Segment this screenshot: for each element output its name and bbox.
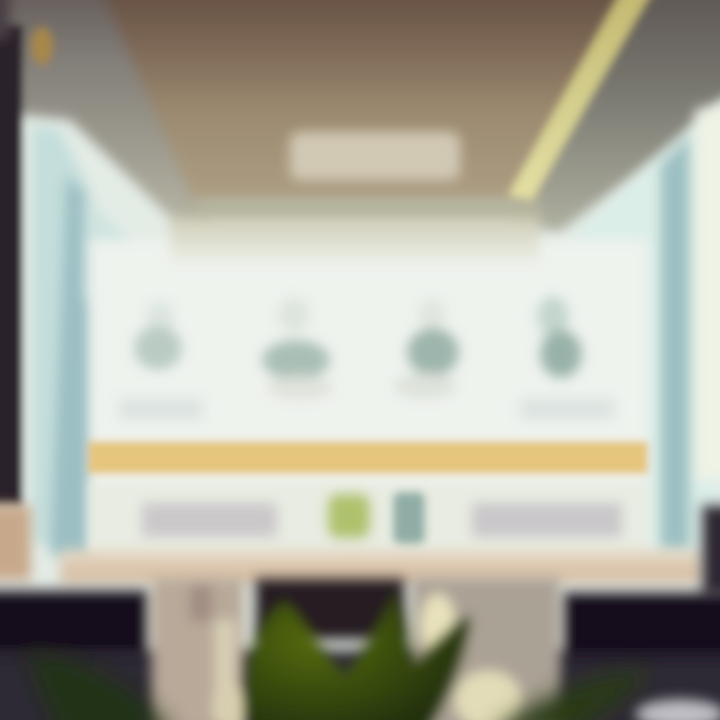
wall panel xyxy=(90,240,648,555)
orange light xyxy=(31,27,53,65)
plant leaves left xyxy=(25,650,175,720)
table edge xyxy=(60,550,700,582)
dark seating left xyxy=(0,590,148,656)
yellow banner xyxy=(88,441,648,474)
blurred captions xyxy=(118,398,615,420)
left ceiling beam xyxy=(0,0,215,232)
left dark column top xyxy=(0,0,10,40)
lower panel xyxy=(88,482,648,554)
dark seating right xyxy=(563,592,720,658)
icon: blurred graphic 1 xyxy=(134,300,182,370)
icon: blurred graphic 3 xyxy=(393,298,459,399)
lower left text block xyxy=(142,503,277,537)
blurred ceiling sign xyxy=(290,132,460,180)
right window xyxy=(575,100,720,560)
icon: blurred graphic 2 xyxy=(262,297,334,400)
cream highlights xyxy=(214,593,720,720)
left dark column xyxy=(0,25,23,505)
dark corner right xyxy=(702,505,720,595)
green square xyxy=(328,494,370,538)
left window xyxy=(32,125,130,560)
ceiling light strip xyxy=(508,0,662,200)
right ceiling beam xyxy=(510,0,720,232)
teal square xyxy=(393,492,425,544)
lower floor xyxy=(0,650,720,720)
left column base xyxy=(0,505,31,580)
wall top fade xyxy=(170,218,540,268)
ceiling xyxy=(95,0,630,205)
plant leaves right xyxy=(490,670,650,720)
ceiling soffit band xyxy=(195,198,540,224)
icon: blurred graphic 4 xyxy=(537,296,582,378)
plant xyxy=(245,590,470,720)
table legs xyxy=(152,578,560,720)
lower right text block xyxy=(472,503,622,537)
dark seating center xyxy=(255,578,405,640)
